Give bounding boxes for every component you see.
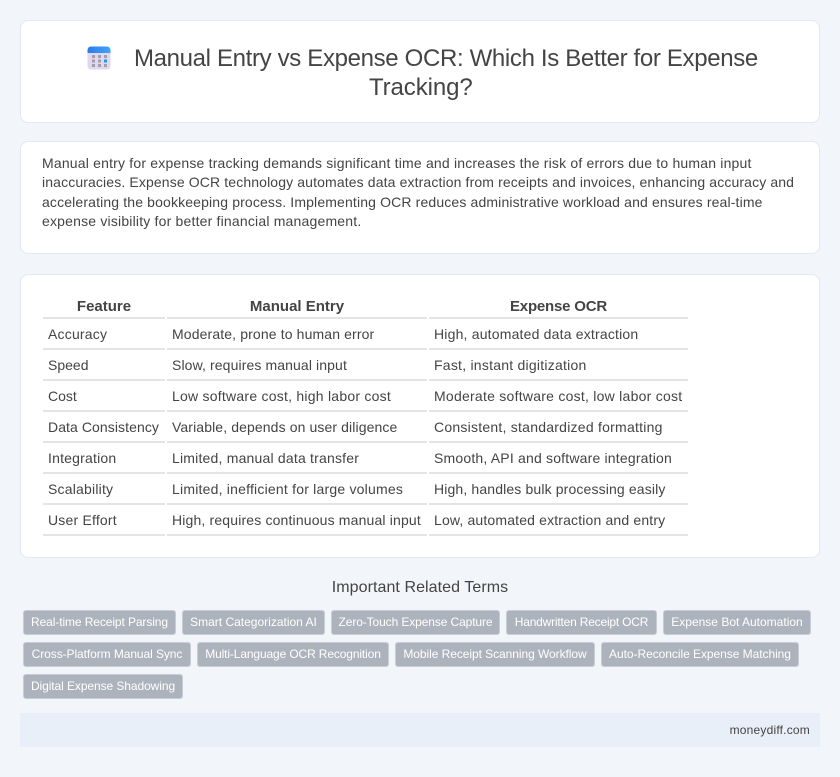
comparison table: Expense OCR	[510, 298, 607, 315]
related term tags: Smart Categorization AI	[190, 615, 317, 629]
summary card	[20, 141, 820, 254]
comparison table: User Effort	[48, 512, 117, 528]
related term tags	[23, 610, 811, 699]
related term tags: Auto-Reconcile Expense Matching	[609, 647, 791, 661]
comparison table: Manual Entry	[250, 298, 344, 315]
title: Tracking?	[369, 74, 473, 101]
comparison table: High, handles bulk processing easily	[434, 481, 666, 497]
comparison table: Moderate, prone to human error	[172, 326, 374, 342]
related term tags: Cross-Platform Manual Sync	[32, 647, 182, 661]
comparison table: Low, automated extraction and entry	[434, 512, 665, 528]
comparison table	[43, 298, 688, 536]
related term tags: Digital Expense Shadowing	[31, 679, 175, 693]
header card	[20, 20, 820, 123]
comparison table: Cost	[48, 388, 77, 404]
comparison table: High, automated data extraction	[434, 326, 638, 342]
comparison table: Integration	[48, 450, 116, 466]
summary text: inaccuracies. Expense OCR technology automates data extraction from receipts and invoices, enhancing accuracy and	[42, 174, 794, 190]
related terms heading: Important Related Terms	[332, 579, 508, 596]
comparison table: Variable, depends on user diligence	[172, 419, 397, 435]
related term tags: Zero-Touch Expense Capture	[339, 615, 492, 629]
comparison table: Moderate software cost, low labor cost	[434, 388, 682, 404]
title	[134, 45, 758, 101]
comparison table: High, requires continuous manual input	[172, 512, 421, 528]
related term tags: Real-time Receipt Parsing	[31, 615, 168, 629]
comparison table: Accuracy	[48, 326, 107, 342]
related term tags: Mobile Receipt Scanning Workflow	[403, 647, 587, 661]
footer bar	[20, 713, 820, 747]
footer source: moneydiff.com	[730, 723, 810, 737]
comparison table: Limited, manual data transfer	[172, 450, 359, 466]
comparison table: Feature	[77, 298, 131, 315]
related term tags: Expense Bot Automation	[671, 615, 803, 629]
comparison table: Slow, requires manual input	[172, 357, 347, 373]
icon: calendar	[88, 46, 110, 70]
summary text: expense visibility for better financial management.	[42, 213, 361, 229]
comparison table: Data Consistency	[48, 419, 159, 435]
comparison table: Speed	[48, 357, 88, 373]
title: Manual Entry vs Expense OCR: Which Is Better for Expense	[134, 45, 758, 72]
summary text: Manual entry for expense tracking demands significant time and increases the risk of errors due to human input	[42, 154, 752, 170]
related term tags: Multi-Language OCR Recognition	[205, 647, 381, 661]
comparison table: Low software cost, high labor cost	[172, 388, 391, 404]
summary text	[42, 154, 794, 229]
comparison table: Scalability	[48, 481, 113, 497]
comparison table: Fast, instant digitization	[434, 357, 587, 373]
summary text: accelerating the bookkeeping process. Implementing OCR reduces administrative workload and ensures real-time	[42, 194, 763, 210]
comparison table: Limited, inefficient for large volumes	[172, 481, 403, 497]
comparison table: Smooth, API and software integration	[434, 450, 672, 466]
comparison table: Consistent, standardized formatting	[434, 419, 663, 435]
table card	[20, 274, 820, 558]
related term tags: Handwritten Receipt OCR	[515, 615, 648, 629]
